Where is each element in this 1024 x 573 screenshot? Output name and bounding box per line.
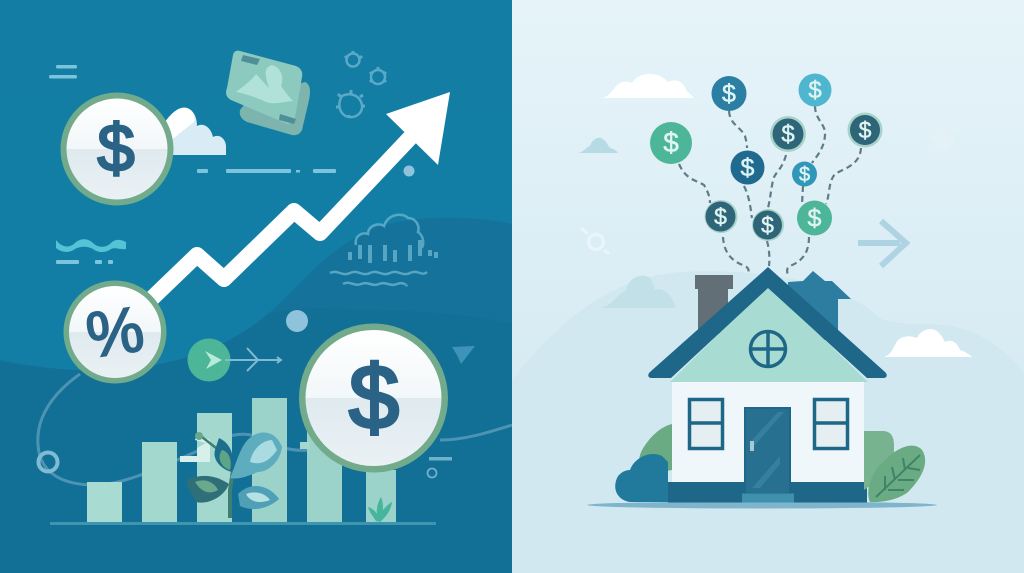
coin: $ — [781, 121, 795, 148]
back roof annex — [788, 271, 851, 340]
coin — [770, 116, 806, 152]
connector curve — [38, 374, 512, 485]
small cloud left — [578, 138, 618, 153]
gable — [670, 285, 868, 382]
small marks right of coin — [428, 457, 452, 478]
coin: $ — [859, 117, 872, 143]
roof — [648, 267, 887, 378]
ring bottom left — [38, 452, 58, 472]
icon: green arrow button — [188, 338, 281, 382]
coin — [797, 200, 832, 236]
coin — [730, 150, 764, 184]
door step — [742, 494, 794, 502]
coin — [848, 112, 882, 148]
window left — [689, 400, 723, 448]
money coins — [650, 74, 882, 241]
icon: small sprout — [368, 497, 392, 522]
chart arrow rising — [145, 92, 450, 305]
dashed money paths — [679, 106, 861, 276]
decorative dashes top left — [49, 65, 77, 78]
coin — [650, 122, 692, 164]
cloud top left — [602, 74, 694, 98]
panel: rising costs background — [0, 0, 512, 573]
faint icon left — [581, 228, 609, 254]
waves and dashes left — [56, 239, 126, 264]
cloud right of house — [884, 329, 972, 357]
bar chart — [50, 398, 436, 525]
round window — [750, 331, 786, 367]
coin: $ — [722, 80, 736, 108]
icon: banknote stack — [226, 51, 310, 135]
ground shadow — [587, 502, 937, 508]
bush right — [864, 431, 925, 502]
coin — [704, 200, 738, 233]
chimney — [695, 275, 733, 334]
panel: house background — [512, 0, 1024, 573]
coin: $ — [741, 154, 755, 182]
bush left green — [639, 424, 672, 474]
base — [668, 482, 867, 502]
icon: house — [587, 267, 937, 508]
coin: $ — [663, 127, 679, 158]
icon: large dollar coin — [299, 324, 448, 472]
coin: $ — [808, 77, 822, 104]
icon: gears top — [336, 51, 386, 118]
icon: plant over chart — [180, 432, 282, 518]
coin: $ — [808, 204, 822, 232]
door — [745, 408, 790, 494]
cloud behind dollar coin — [165, 108, 226, 155]
icon: percent coin — [64, 280, 166, 384]
coin — [712, 76, 746, 111]
icon: large dollar coin: $ — [349, 348, 399, 448]
small triangle — [452, 346, 475, 364]
dot near arrow — [404, 166, 414, 176]
cloud behind house left — [600, 276, 676, 308]
icon: dollar coin top: $ — [97, 111, 135, 186]
coin: $ — [714, 204, 727, 230]
coin — [792, 162, 817, 186]
icon: percent coin: % — [82, 292, 148, 372]
bush left blue — [615, 454, 668, 502]
faint gear right — [926, 126, 960, 150]
dot above large coin — [286, 310, 308, 332]
window right — [814, 400, 848, 448]
house wall — [672, 382, 864, 484]
coin — [798, 74, 832, 106]
coin: $ — [799, 164, 810, 186]
arrow right pale — [858, 221, 906, 266]
icon: cloud with rain outline — [330, 215, 436, 285]
icon: dollar coin top — [60, 92, 174, 206]
coin: $ — [761, 212, 774, 238]
dashed line under cloud — [197, 169, 336, 173]
coin — [752, 209, 784, 241]
